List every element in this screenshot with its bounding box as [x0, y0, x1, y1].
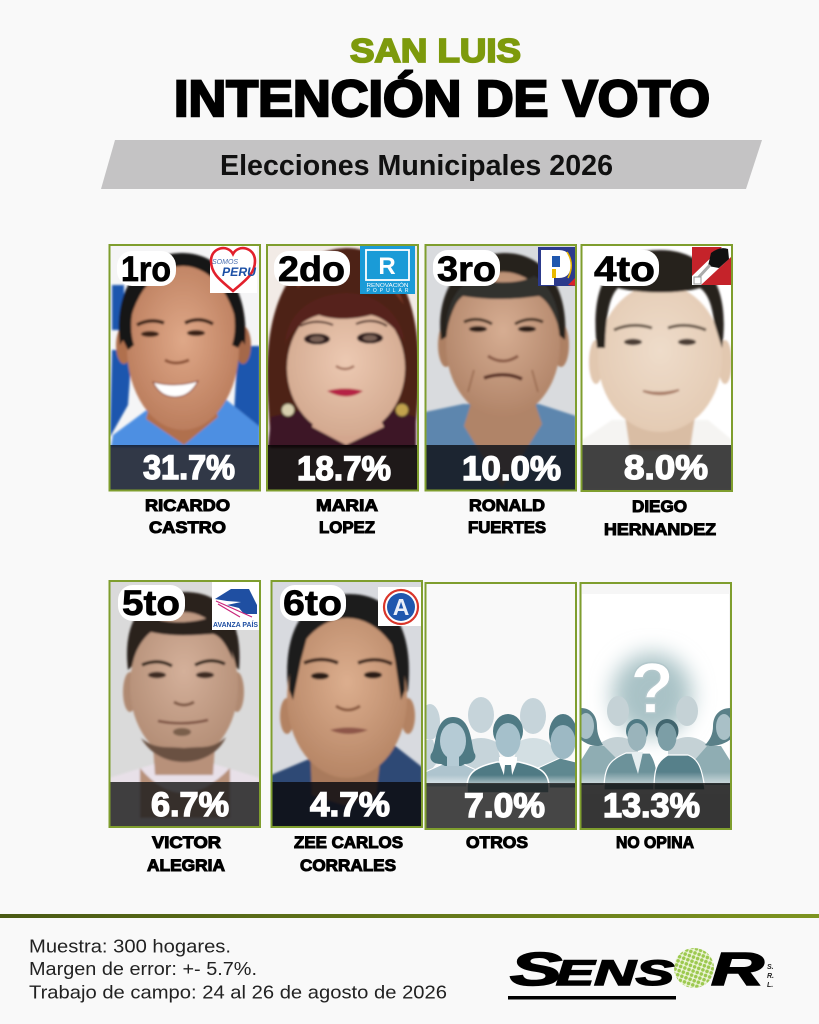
name: CORRALES: [300, 857, 396, 875]
percentage: 8.0%: [624, 449, 708, 487]
subtitle banner: Elecciones Municipales 2026: [220, 150, 613, 182]
card: Zee Carlos Corrales 6to: [271, 581, 422, 875]
card: No opina: [578, 583, 732, 852]
percentage: 18.7%: [297, 450, 391, 488]
subtitle banner: [101, 140, 762, 189]
name: [316, 497, 378, 537]
name: FUERTES: [468, 519, 546, 537]
rank badge: 3ro: [437, 250, 496, 289]
name: RICARDO: [145, 497, 230, 515]
name: [145, 497, 230, 537]
card: Maria Lopez 2do: [267, 245, 419, 537]
name: CASTRO: [149, 519, 226, 537]
logo: Acción Popular: A: [393, 594, 409, 620]
logo: Acción Popular: [378, 587, 422, 626]
name: NO OPINA: [616, 834, 694, 852]
icon: question mark: ?: [630, 649, 674, 729]
name: [468, 497, 546, 537]
logo: P party: [538, 247, 576, 286]
name: LOPEZ: [319, 519, 375, 537]
rank badge: 5to: [122, 584, 180, 623]
logo: Sensor SRL: R.: [767, 973, 774, 980]
rank badge: 4to: [594, 250, 655, 289]
heading: San Luis: SAN LUIS: [350, 32, 521, 69]
logo: Avanza País: AVANZA PAÍS: [213, 620, 258, 629]
methodology notes: Margen de error: +- 5.7%.: [29, 959, 257, 979]
logo: Renovación Popular: POPULAR: [366, 288, 409, 294]
percentage: 4.7%: [310, 786, 390, 824]
name: [147, 834, 225, 875]
card: Victor Alegria 5to: [109, 581, 260, 875]
logo: shovel party: [692, 247, 731, 285]
methodology notes: Muestra: 300 hogares.: [29, 936, 231, 956]
logo: Somos Peru: SOMOS: [212, 259, 238, 266]
logo: Renovación Popular: R: [378, 253, 396, 280]
logo: Renovación Popular: [360, 246, 415, 294]
logo: Sensor SRL: S.: [767, 964, 774, 971]
name: OTROS: [466, 834, 528, 852]
card: Diego Hernandez 4to: [581, 245, 732, 539]
logo: Sensor SRL: L.: [767, 982, 773, 989]
name: RONALD: [469, 497, 545, 515]
percentage: 6.7%: [151, 786, 229, 824]
methodology notes: [29, 936, 447, 1002]
card: Ricardo Castro 1ro: [109, 245, 260, 537]
name: ALEGRIA: [147, 857, 225, 875]
name: [604, 498, 716, 539]
percentage: 7.0%: [464, 787, 545, 825]
logo: Renovación Popular: RENOVACIÓN: [366, 282, 409, 289]
methodology notes: Trabajo de campo: 24 al 26 de agosto de 2026: [29, 982, 447, 1002]
name: DIEGO: [632, 498, 687, 516]
name: [294, 834, 403, 875]
percentage: 13.3%: [603, 787, 700, 825]
percentage: 31.7%: [143, 449, 235, 487]
card: Ronald Fuertes 3ro: [425, 245, 576, 537]
rank badge: 1ro: [121, 250, 171, 289]
logo: Avanza País: [212, 582, 259, 630]
card: Otros: [420, 583, 577, 852]
name: ZEE CARLOS: [294, 834, 403, 852]
logo: Sensor SRL: [508, 943, 774, 1000]
logo: Sensor SRL: S: [510, 943, 563, 995]
rank badge: 2do: [278, 250, 345, 289]
name: VICTOR: [152, 834, 221, 852]
logo: Sensor SRL: R: [711, 943, 764, 995]
logo: Sensor SRL: ENS: [556, 954, 674, 993]
name: HERNANDEZ: [604, 521, 716, 539]
logo: Somos Peru: PERU: [222, 265, 256, 279]
logo: Somos Peru: [210, 246, 257, 293]
percentage: 10.0%: [462, 450, 561, 488]
name: MARIA: [316, 497, 378, 515]
title: Intención de voto: INTENCIÓN DE VOTO: [174, 70, 710, 127]
rank badge: 6to: [283, 584, 342, 623]
